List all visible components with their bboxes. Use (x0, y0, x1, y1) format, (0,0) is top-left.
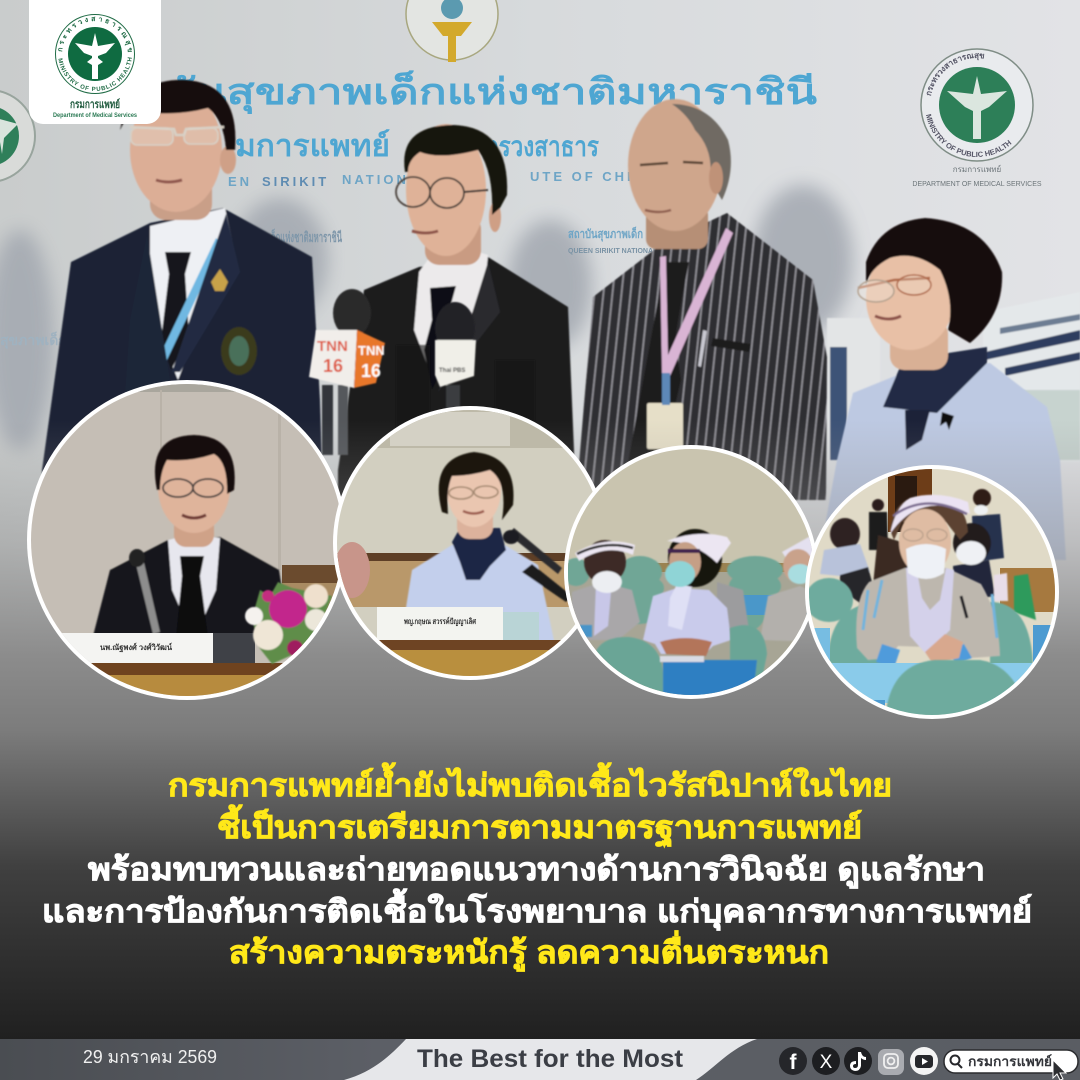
person 4: woman doctor in light blue coat (826, 218, 1066, 560)
backdrop lettering: ันสุขภาพเด็กแห่งชาติมหาราชินี (177, 69, 818, 115)
backdrop emblem top partial (406, 0, 498, 62)
icon: facebook: f (790, 1051, 798, 1074)
headline text block (42, 762, 1032, 972)
microphones: TNN (358, 343, 385, 358)
body line 1: พร้อมทบทวนและถ่ายทอดแนวทางด้านการวินิจฉัย ดูแลรักษา (88, 852, 985, 889)
headline line 1: กรมการแพทย์ย้ำยังไม่พบติดเชื้อไวรัสนิปาห์ในไทย (168, 762, 892, 803)
icon: tiktok (844, 1047, 872, 1075)
logo card (29, 0, 161, 124)
logo emblem (55, 14, 135, 94)
backdrop emblem right: MINISTRY OF PUBLIC HEALTH (926, 114, 1012, 157)
icon: instagram (878, 1049, 904, 1075)
footer band (0, 1039, 1080, 1080)
backdrop lettering: SIRIKIT (262, 174, 329, 189)
microphones (309, 289, 535, 455)
slogan: The Best for the Most (417, 1045, 684, 1073)
backdrop lettering: UTE OF CHILD (530, 169, 657, 184)
icon: X (812, 1047, 840, 1075)
photo circle 4: masked nurse in audience (800, 460, 1065, 728)
backdrop emblem left partial (0, 90, 35, 182)
flower bouquet (245, 582, 332, 664)
backdrop lettering: EN (228, 174, 252, 189)
closing line: สร้างความตระหนักรู้ ลดความตื่นตระหนก (229, 930, 829, 972)
microphones: Thai PBS (439, 368, 465, 374)
shadows on backdrop (0, 185, 853, 450)
backdrop emblem right: DEPARTMENT OF MEDICAL SERVICES (912, 181, 1042, 188)
microphones: 16 (361, 361, 381, 381)
backdrop emblem right: กระทรวงสาธารณสุข (926, 53, 984, 96)
photo circle 2: woman doctor at podium (330, 405, 610, 686)
backdrop lettering: เด็กแห่งชาติมหาราชินี (268, 228, 342, 245)
backdrop emblem right: กรมการแพทย์ (953, 164, 1001, 174)
photo circle 3: nurses in audience (560, 440, 820, 705)
search bar (944, 1050, 1078, 1080)
hospital building image right (827, 292, 1080, 462)
person 1: left official in navy suit (42, 80, 324, 540)
person 3: senior doctor in striped shirt (576, 99, 827, 510)
body line 2: และการป้องกันการติดเชื้อในโรงพยาบาล แก่บุคลากรทางการแพทย์ (42, 888, 1032, 931)
backdrop lettering: QUEEN SIRIKIT NATIONAL (568, 248, 658, 255)
far right nurse (761, 536, 812, 642)
slogan ribbon (344, 1039, 757, 1080)
microphones: TNN (317, 338, 348, 355)
icon: youtube (910, 1047, 938, 1075)
backdrop lettering (0, 69, 818, 349)
photo circle 1: speaker at podium (27, 380, 341, 700)
left nurse (570, 540, 640, 640)
centre nurse (643, 529, 749, 656)
footer date: 29 มกราคม 2569 (83, 1047, 217, 1067)
backdrop lettering: มการแพทย์ (235, 129, 390, 163)
photo circle 2: woman doctor at podium: พญ.กฤษณ สวรรค์ปัญญาเลิศ (404, 616, 477, 627)
backdrop emblem right (912, 48, 1042, 188)
logo emblem: กระทรวงสาธารณสุข (58, 16, 132, 52)
backdrop lettering: สุขภาพเด็ก (0, 331, 67, 349)
headline line 2: ชี้เป็นการเตรียมการตามมาตรฐานการแพทย์ (217, 804, 862, 848)
logo subtitle: Department of Medical Services (53, 113, 138, 119)
person 2: centre official in black suit (338, 124, 574, 540)
logo wordmark: กรมการแพทย์ (70, 98, 120, 111)
icon: X: X (820, 1052, 833, 1073)
backdrop lettering: NATION (342, 172, 409, 187)
photo circle 1: speaker at podium: นพ.ณัฐพงศ์ วงศ์วิวัฒน์ (100, 642, 173, 653)
logo emblem: MINISTRY OF PUBLIC HEALTH (58, 57, 132, 91)
microphones: 16 (323, 356, 343, 376)
backdrop lettering: สถาบันสุขภาพเด็ก (568, 226, 643, 242)
search bar: กรมการแพทย์ (968, 1054, 1052, 1069)
backdrop lettering: ตรวงสาธาร (484, 131, 599, 162)
icon: cursor (1053, 1060, 1066, 1080)
chairs and desk (570, 625, 767, 700)
icon: facebook (779, 1047, 807, 1075)
gray gradient overlay (0, 420, 1080, 1040)
